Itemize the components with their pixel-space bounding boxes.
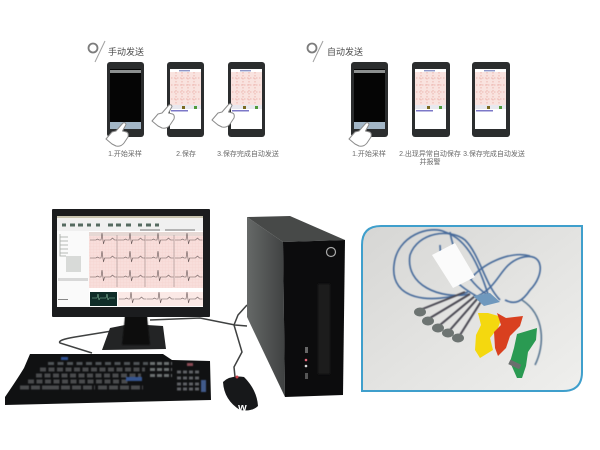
icon: circle and slash (308, 41, 323, 62)
green clip (510, 328, 537, 378)
label: step 2 second line: 并报警 (420, 157, 440, 166)
heading: manual send: 手动发送 (108, 46, 144, 57)
phone: start sampling (106, 62, 144, 146)
photo frame (362, 226, 582, 391)
cables between monitor, keyboard, tower, mouse (60, 305, 247, 377)
label: step 2: 2.出现异常自动保存 (399, 149, 461, 158)
indicator lights (305, 347, 308, 379)
watermark fragment: www (206, 402, 254, 414)
phone: saved, auto send (212, 62, 265, 137)
cable junction (473, 293, 500, 306)
phone: start sampling (349, 62, 388, 146)
stand (102, 316, 166, 350)
panel: automatic send (308, 41, 525, 166)
mouse (223, 376, 258, 410)
screen: ECG software (57, 216, 203, 307)
tower front (283, 240, 345, 397)
phone: save (152, 62, 204, 137)
monitor (52, 209, 210, 350)
panel: manual send (88, 41, 279, 158)
electrode snaps (414, 308, 464, 342)
label: step 1: 1.开始采样 (352, 149, 386, 158)
keyboard (5, 354, 211, 405)
monitor bezel (52, 209, 210, 317)
tower top (247, 216, 345, 242)
power button (326, 248, 336, 256)
panel: ECG leads photo (362, 226, 582, 391)
label: step 3: 3.保存完成自动发送 (463, 149, 525, 158)
computer tower (247, 216, 345, 397)
label: step 1: 1.开始采样 (108, 149, 142, 158)
icon: circle and slash (88, 41, 105, 62)
yellow clip (475, 313, 502, 358)
label: step 3: 3.保存完成自动发送 (217, 149, 279, 158)
white module (432, 243, 475, 288)
vent (318, 284, 330, 374)
phone: abnormal, auto save and alarm (412, 62, 450, 137)
tower side (247, 217, 285, 397)
heading: automatic send: 自动发送 (327, 46, 363, 57)
red clip (494, 313, 523, 356)
lead wires (394, 230, 541, 365)
phone: saved, auto send (472, 62, 510, 137)
label: step 2: 2.保存 (176, 149, 196, 158)
